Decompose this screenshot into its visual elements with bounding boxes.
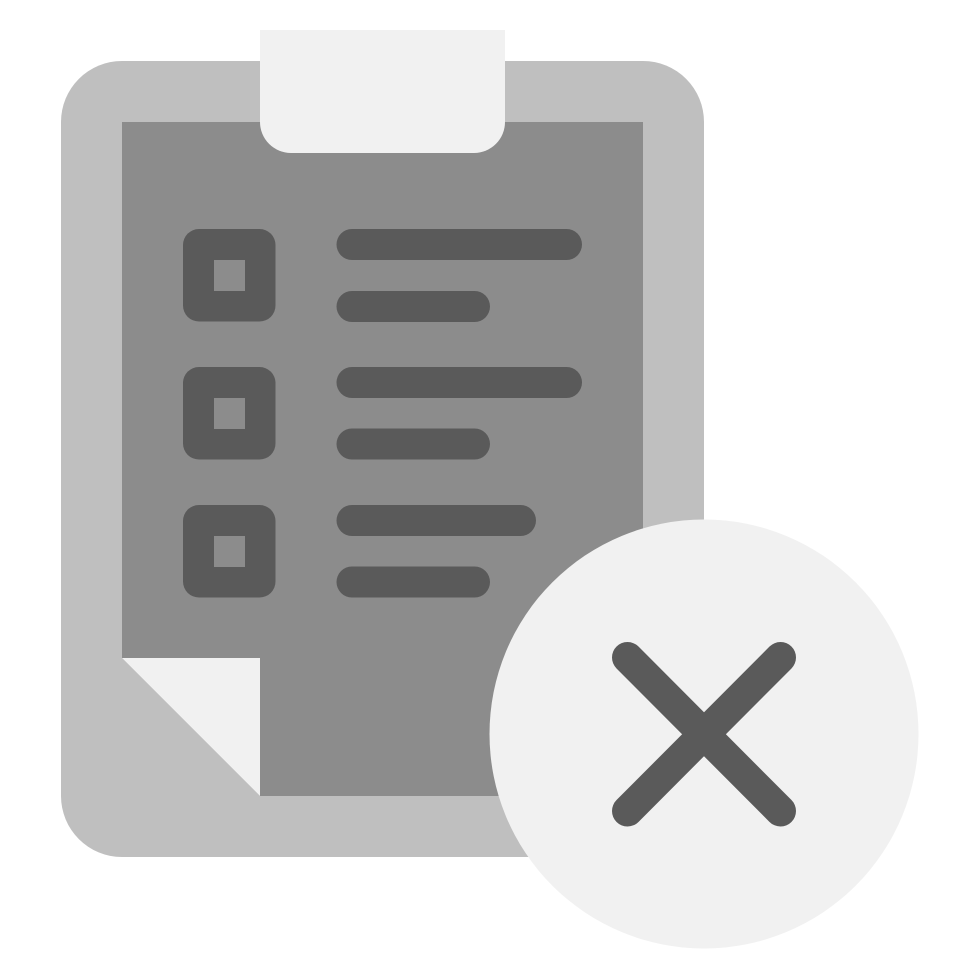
checklist row 3 bbox=[183, 505, 536, 598]
clipboard clip bbox=[260, 30, 505, 153]
checklist row 2 bbox=[183, 367, 582, 460]
paper sheet bbox=[122, 122, 643, 796]
rejection badge circle bbox=[490, 520, 918, 948]
paper folded corner bbox=[122, 658, 260, 796]
clipboard board bbox=[61, 61, 704, 857]
cross mark bbox=[628, 658, 780, 811]
checklist row 1 bbox=[183, 229, 582, 322]
